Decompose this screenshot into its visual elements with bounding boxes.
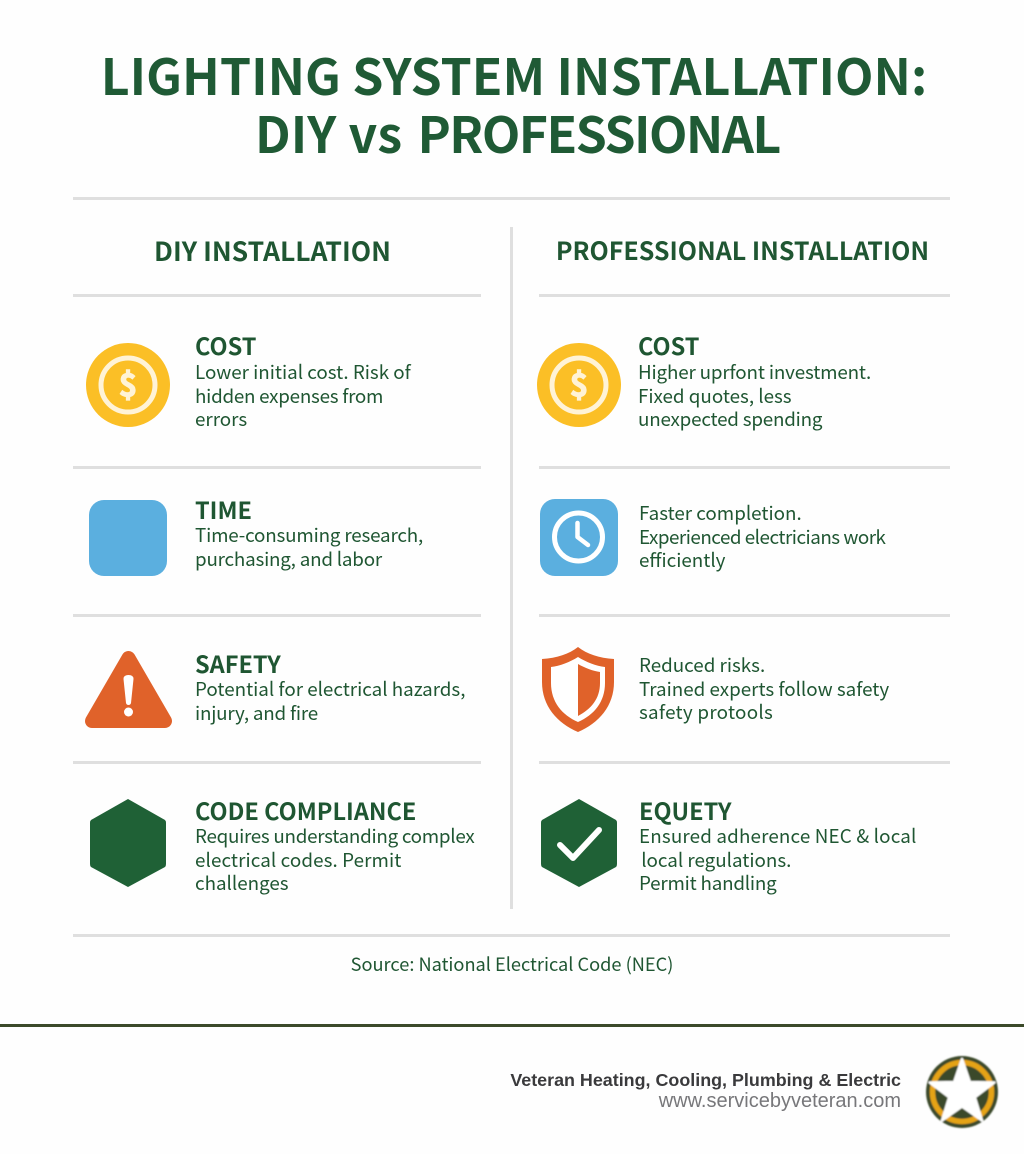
footer company name: Veteran Heating, Cooling, Plumbing & Electric xyxy=(510,1070,901,1090)
icon: professional equity check hexagon xyxy=(541,799,617,887)
text: DIY time xyxy=(195,492,423,572)
text: professional safety: Reduced risks. Trained experts follow safety safety protools xyxy=(639,651,889,725)
icon: professional safety shield xyxy=(542,647,614,732)
text: DIY safety: SAFETY xyxy=(195,646,281,680)
icon: veteran star logo xyxy=(924,1054,1000,1130)
text: professional equity: Ensured adherence NEC & local local regulations. Permit handling xyxy=(639,822,916,896)
footer website: www.servicebyveteran.com xyxy=(659,1090,901,1112)
text: DIY safety: Potential for electrical hazards, injury, and fire xyxy=(195,675,465,726)
text: DIY code compliance: Requires understanding complex electrical codes. Permit challenges xyxy=(195,822,474,896)
icon: DIY safety warning triangle xyxy=(85,651,172,728)
heading: DIY installation: DIY INSTALLATION xyxy=(154,230,391,269)
text: DIY time: TIME xyxy=(195,492,252,526)
icon: DIY time blank square xyxy=(89,500,167,576)
title xyxy=(101,38,927,168)
text: professional cost: COST xyxy=(638,328,699,362)
text: professional time: Faster completion. Experienced electricians work efficiently xyxy=(639,499,885,573)
text: DIY time: Time-consuming research, purchasing, and labor xyxy=(195,521,423,572)
text: professional cost: Higher uprfont investment. Fixed quotes, less unexpected spending xyxy=(638,358,871,432)
icon: professional time clock xyxy=(540,499,618,576)
text: DIY code compliance: CODE COMPLIANCE xyxy=(195,793,416,827)
icon: professional cost coin: $ xyxy=(570,360,588,405)
icon: DIY cost coin xyxy=(86,343,170,427)
icon: DIY code hexagon xyxy=(90,799,166,887)
footer rule xyxy=(0,1024,1024,1027)
source note: Source: National Electrical Code (NEC) xyxy=(351,951,673,977)
icon: professional cost coin xyxy=(537,343,621,427)
text: DIY cost: Lower initial cost. Risk of hidden expenses from errors xyxy=(195,358,411,432)
title: LIGHTING SYSTEM INSTALLATION: xyxy=(101,38,927,110)
text: DIY safety xyxy=(195,646,465,726)
heading: professional installation: PROFESSIONAL INSTALLATION xyxy=(556,232,929,268)
title: DIY vs PROFESSIONAL xyxy=(255,96,780,168)
text: DIY cost: COST xyxy=(195,328,256,362)
icon: DIY cost coin: $ xyxy=(119,360,137,405)
text: professional equity: EQUETY xyxy=(639,793,731,827)
